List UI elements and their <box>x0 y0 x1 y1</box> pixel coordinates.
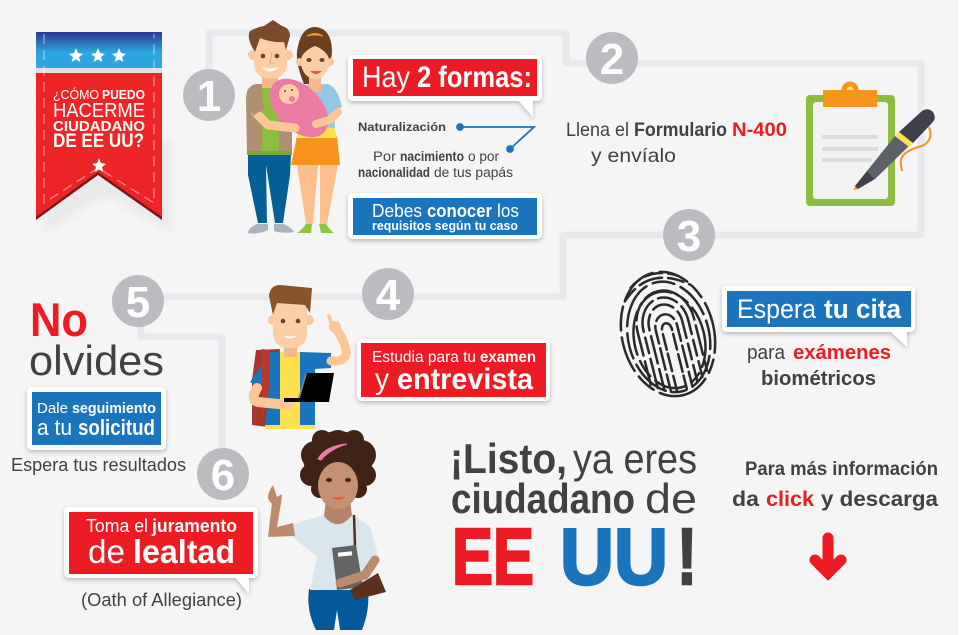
man <box>246 20 294 234</box>
heading: Listo, ya eres ciudadano de EE UU: ¡Listo, <box>450 435 567 482</box>
text: nacimiento o nacionalidad: Por <box>373 149 397 164</box>
heading: Listo, ya eres ciudadano de EE UU: ! <box>677 512 697 601</box>
callout: Debes conocer los requisitos: conocer <box>427 201 492 221</box>
icon: down arrow <box>815 538 841 573</box>
callout: Debes conocer los requisitos <box>348 193 542 239</box>
step 5 number: 5 <box>126 278 150 327</box>
step 5 number <box>112 275 164 327</box>
text: Para más información da click y descarga: click <box>766 488 814 511</box>
text: Oath of Allegiance: (Oath of Allegiance) <box>81 590 242 610</box>
text: Espera tus resultados: Espera tus resultados <box>11 455 186 475</box>
icon: fingerprint <box>608 262 728 406</box>
woman <box>291 27 342 233</box>
callout: Toma el juramento de lealtad: juramento <box>151 516 237 536</box>
step 4 number: 4 <box>376 271 401 320</box>
text: nacimiento o nacionalidad: nacionalidad <box>358 165 430 180</box>
text: Para más información da click y descarga: Para más información <box>745 458 938 480</box>
callout: Espera tu cita <box>722 286 915 347</box>
callout: Estudia para tu examen y entrevista: examen <box>480 349 536 366</box>
heading: No olvides: olvides <box>29 337 164 384</box>
icon: clipboard and pen <box>806 82 935 206</box>
title text: DE EE UU? <box>53 131 144 152</box>
step 3 number: 3 <box>677 212 701 261</box>
callout: Dale seguimiento a tu solicitud: Dale <box>37 400 68 417</box>
text: Llena el Formulario N-400: N-400 <box>732 119 787 141</box>
illustration: family <box>246 20 342 234</box>
heading: Listo, ya eres ciudadano de EE UU: ciudadano <box>451 475 635 522</box>
callout: Estudia para tu examen y entrevista: y <box>375 363 389 396</box>
text: Para más información da click y descarga: y descarga <box>821 488 938 511</box>
heading: Listo, ya eres ciudadano de EE UU: de <box>645 475 697 522</box>
text: nacimiento o nacionalidad: o por <box>468 149 499 164</box>
text: Llena el Formulario N-400: Formulario <box>634 119 727 141</box>
connector path between steps <box>140 33 921 470</box>
callout: Debes conocer los requisitos: requisitos según tu caso <box>372 219 518 233</box>
callout: Estudia para tu examen y entrevista: Estudia para tu <box>372 349 476 366</box>
title text: CIUDADANO <box>53 118 145 135</box>
diagram: connector dots <box>457 124 534 152</box>
illustration: student <box>250 285 346 429</box>
callout: Toma el juramento de lealtad: lealtad <box>133 533 235 570</box>
text: nacimiento o nacionalidad: nacimiento <box>400 149 464 164</box>
callout: Toma el juramento de lealtad <box>64 507 258 594</box>
text: para exámenes biométricos: biométricos <box>761 368 876 390</box>
callout: Hay 2 formas: 2 formas: <box>417 61 532 94</box>
text: nacimiento o nacionalidad: de tus papás <box>434 165 513 180</box>
callout: Dale seguimiento a tu solicitud <box>27 387 166 450</box>
step 6 number <box>197 448 249 500</box>
callout: Estudia para tu examen y entrevista <box>357 339 550 401</box>
text: Para más información da click y descarga: da <box>732 488 759 511</box>
title text: PUEDO <box>102 87 145 102</box>
step 1 number: 1 <box>197 72 221 121</box>
callout: Debes conocer los requisitos: Debes <box>372 201 422 221</box>
step 2 number: 2 <box>600 35 624 84</box>
callout: Dale seguimiento a tu solicitud: a tu <box>37 415 72 440</box>
callout: Espera tu cita: tu cita <box>824 294 902 324</box>
text: Llena el Formulario N-400: y envíalo <box>591 145 676 167</box>
text: para exámenes biométricos: exámenes <box>793 342 891 364</box>
step 3 number <box>663 209 715 261</box>
title text: HACERME <box>53 100 145 122</box>
heading: Listo, ya eres ciudadano de EE UU: UU <box>560 512 668 601</box>
title ribbon <box>36 32 172 235</box>
text: Llena el Formulario N-400: Llena el <box>566 119 629 141</box>
title text: ¿CÓMO <box>53 87 99 102</box>
step 4 number <box>362 268 414 320</box>
callout: Toma el juramento de lealtad: de <box>88 533 125 570</box>
callout: Debes conocer los requisitos: los <box>497 201 519 221</box>
callout: Estudia para tu examen y entrevista: entrevista <box>397 363 533 396</box>
heading: Listo, ya eres ciudadano de EE UU <box>450 435 697 601</box>
heading: Listo, ya eres ciudadano de EE UU: ya eres <box>573 435 697 482</box>
heading: Listo, ya eres ciudadano de EE UU: EE <box>452 512 534 601</box>
step 2 number <box>586 32 638 84</box>
callout: Dale seguimiento a tu solicitud: seguimiento <box>72 400 156 417</box>
step 6 number: 6 <box>211 451 235 500</box>
arms <box>256 113 295 128</box>
callout: Hay 2 formas: Hay <box>362 61 410 94</box>
heading: No olvides: No <box>30 293 88 346</box>
baby <box>259 68 339 148</box>
callout: Dale seguimiento a tu solicitud: solicitud <box>78 415 155 440</box>
callout: Toma el juramento de lealtad: Toma el <box>86 516 148 536</box>
illustration: woman with book <box>268 430 386 630</box>
text: para exámenes biométricos: para <box>747 342 786 364</box>
callout: Espera tu cita: Espera <box>737 294 817 324</box>
callout: Hay 2 formas <box>348 55 542 117</box>
text: Naturalización: Naturalización <box>358 120 446 134</box>
step 1 number <box>183 69 235 121</box>
